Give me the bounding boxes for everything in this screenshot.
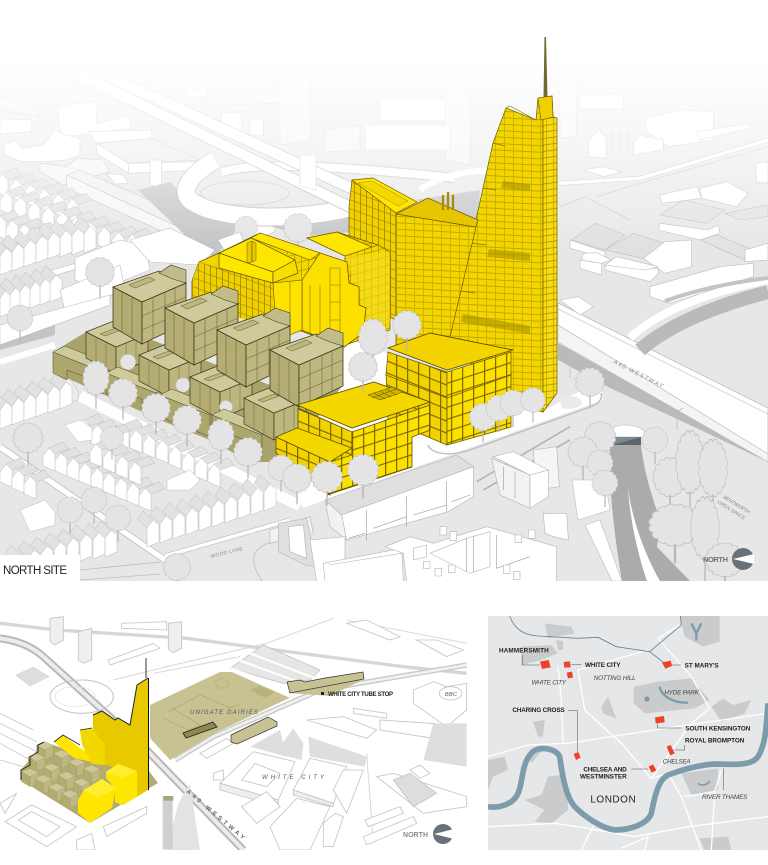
westway elevated road xyxy=(131,106,352,213)
olive terraces underlay xyxy=(53,325,343,462)
panel: london hospital map xyxy=(488,616,768,850)
italic place labels: RIVER THAMES xyxy=(702,794,748,801)
background trees behind site xyxy=(218,213,312,250)
bold hospital labels: HAMMERSMITH xyxy=(499,647,549,654)
olive residential blocks xyxy=(53,265,343,457)
inset text labels: A40 WESTWAY xyxy=(185,789,245,841)
italic place labels: NOTTING HILL xyxy=(594,675,636,682)
north arrow main: NORTH xyxy=(703,555,728,564)
stepped building xyxy=(307,232,390,345)
bold hospital labels: CHELSEA AND xyxy=(583,766,627,773)
hospital markers xyxy=(540,660,675,773)
roads xyxy=(488,625,768,850)
inset text labels: UNIGATE DAIRIES xyxy=(190,710,258,716)
dark canal road xyxy=(572,425,690,581)
italic place labels xyxy=(531,675,748,801)
A40 westway east road xyxy=(558,280,768,462)
panel: location inset west london xyxy=(0,617,467,850)
ground xyxy=(0,135,768,581)
site white ground xyxy=(280,340,603,508)
proposed tower xyxy=(450,37,557,412)
north arrow inset xyxy=(403,824,454,844)
upper centre tower blocks xyxy=(280,125,470,190)
site trees xyxy=(83,311,545,506)
north arrow main xyxy=(703,548,754,570)
interchange loop xyxy=(186,160,500,217)
bold hospital labels: WHITE CITY xyxy=(585,662,621,669)
inset base map xyxy=(0,617,467,850)
terraced housing upper left xyxy=(0,168,215,345)
tube stop marker: WHITE CITY TUBE STOP xyxy=(328,692,393,698)
inset text labels: BBC xyxy=(445,692,457,698)
mini development model xyxy=(21,658,158,823)
building: lower olive xyxy=(231,717,277,744)
unigate dairies olive site xyxy=(150,672,364,760)
inset text labels: WHITE CITY xyxy=(262,775,325,781)
parks xyxy=(488,616,751,850)
white pavement blob xyxy=(560,396,582,409)
london label: LONDON xyxy=(590,795,636,806)
lamp posts and trees right xyxy=(568,352,745,591)
label: A40 westway: A40 WESTWAY xyxy=(611,359,665,390)
bold hospital labels: ST MARY'S xyxy=(685,662,719,669)
upper left background buildings xyxy=(0,102,276,240)
tower faces xyxy=(450,96,553,412)
panel: north site main axonometric xyxy=(0,0,768,592)
terraced housing lower left xyxy=(0,373,276,592)
river thames xyxy=(488,703,768,830)
north arrow inset: NORTH xyxy=(403,832,428,839)
building: upper olive strip xyxy=(287,672,364,693)
darker mechanical bands xyxy=(461,181,530,334)
bottom buildings xyxy=(270,427,570,582)
label: wood lane: WOOD LANE xyxy=(210,546,244,560)
upper right buildings xyxy=(559,106,768,316)
square tower with roof vents xyxy=(396,192,478,345)
bold hospital labels: SOUTH KENSINGTON xyxy=(685,726,751,733)
upper road shadow xyxy=(138,182,352,257)
map detail xyxy=(488,616,768,850)
north site label xyxy=(0,555,80,581)
olive ground under tube strip xyxy=(288,679,364,696)
site kerb line xyxy=(428,393,601,454)
map background xyxy=(488,616,768,850)
yellow low front block xyxy=(276,382,430,495)
label: open space second line: OPEN SPACE xyxy=(716,500,747,522)
leader lines xyxy=(522,655,724,790)
building: dark olive xyxy=(183,722,217,738)
bold hospital labels xyxy=(499,647,751,780)
top fade overlay xyxy=(0,0,768,250)
large mid block xyxy=(192,233,366,347)
italic place labels: CHELSEA xyxy=(663,759,691,766)
bold hospital labels: ROYAL BROMPTON xyxy=(685,737,745,744)
label: open space: BENTWORTH xyxy=(722,495,751,516)
hyde park water xyxy=(660,687,688,703)
italic place labels: HYDE PARK xyxy=(664,690,700,697)
north site label: NORTH SITE xyxy=(3,565,67,577)
bold hospital labels: CHARING CROSS xyxy=(512,707,565,714)
yellow square block xyxy=(386,333,513,445)
bold hospital labels: WESTMINSTER xyxy=(580,773,627,780)
canal line xyxy=(510,616,681,663)
inset text labels xyxy=(185,692,457,841)
spire xyxy=(544,37,548,97)
road curve top right xyxy=(665,278,768,301)
dark area behind buildings xyxy=(0,190,480,350)
italic place labels: WHITE CITY xyxy=(531,679,567,686)
pale road bands lower left xyxy=(0,345,300,581)
slab building behind xyxy=(349,178,417,320)
